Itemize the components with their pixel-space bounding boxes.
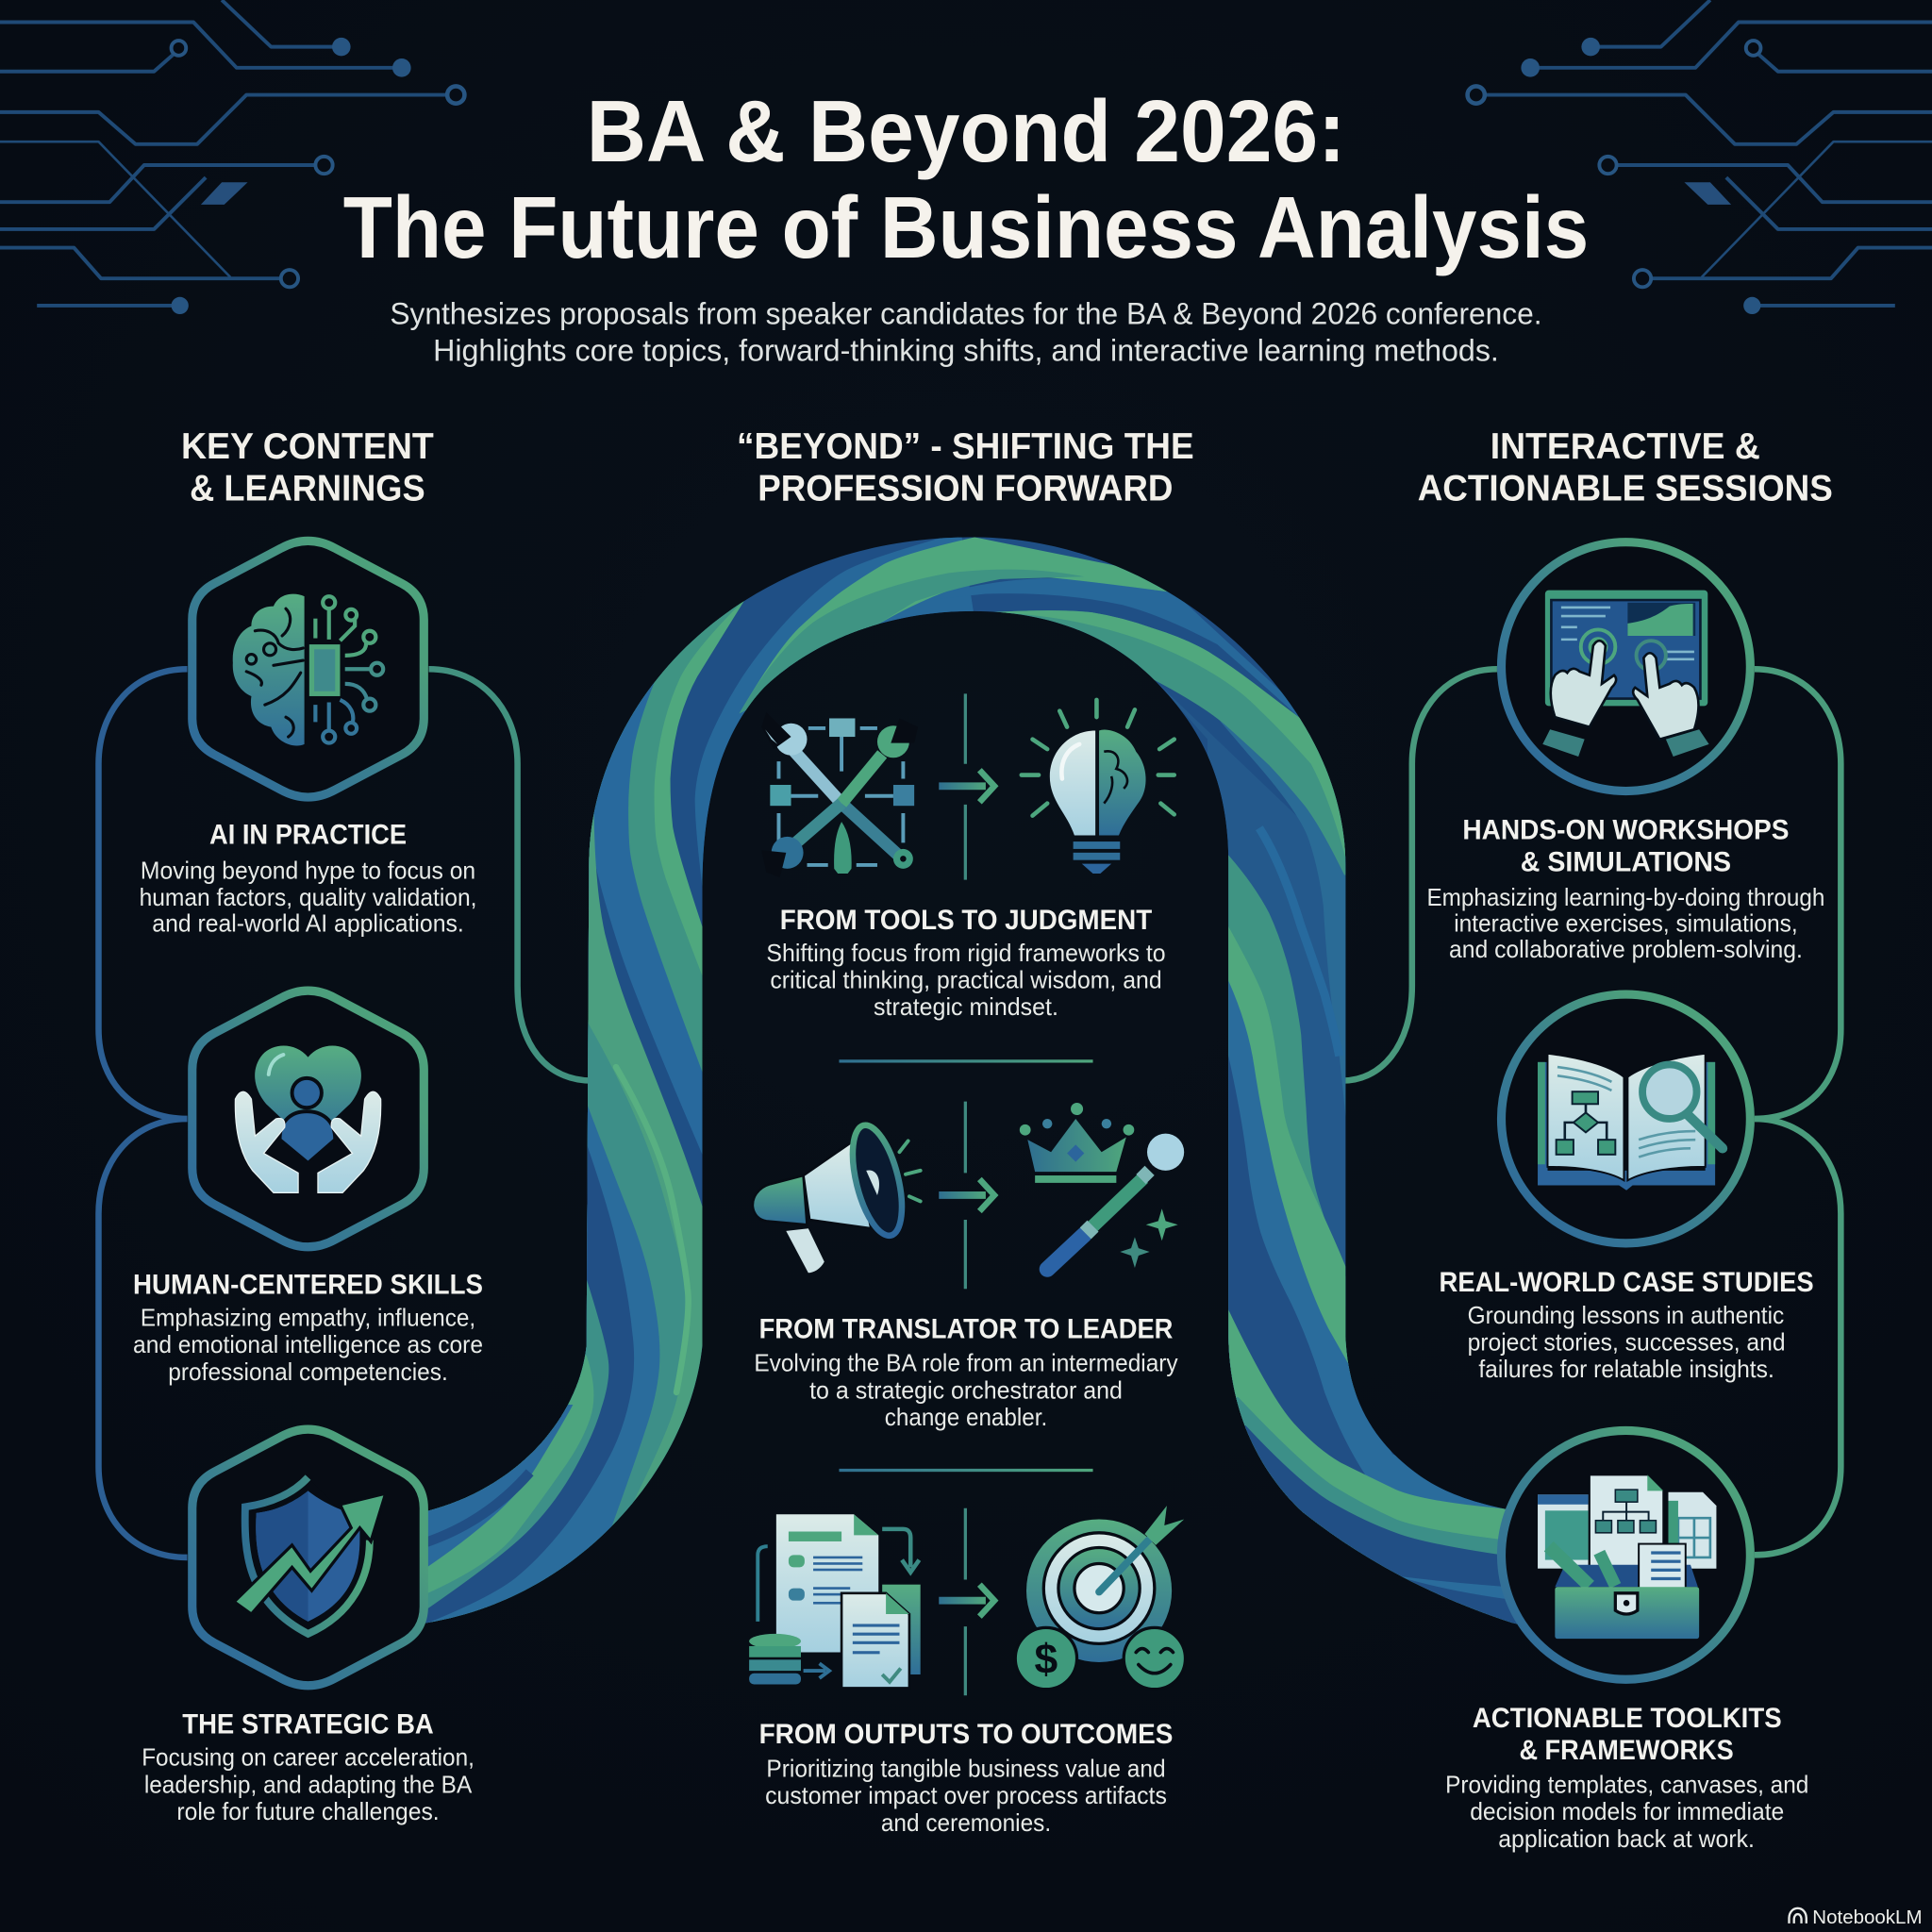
hexagon frame xyxy=(192,991,424,1247)
description: real-world case studies: project stories, successes, and xyxy=(1468,1328,1786,1357)
divider and arrow: translator to leader xyxy=(939,1102,994,1289)
circuit decoration: top right xyxy=(1468,0,1932,314)
description: actionable toolkits xyxy=(1445,1770,1808,1853)
connector lines: left column xyxy=(98,669,591,1557)
heading: human-centered skills: HUMAN-CENTERED SKILLS xyxy=(133,1269,483,1300)
description: from translator to leader: Evolving the BA role from an intermediary xyxy=(754,1349,1178,1377)
divider xyxy=(839,1059,1093,1063)
circle frame xyxy=(1502,994,1750,1243)
description: from tools to judgment: critical thinking, practical wisdom, and xyxy=(770,966,1162,994)
description: the strategic BA xyxy=(142,1743,475,1825)
heading: beyond, shifting the profession forward: “BEYOND” - SHIFTING THE xyxy=(737,426,1194,467)
icon: documents and database xyxy=(749,1514,921,1688)
panel: from translator to leader xyxy=(753,1102,1184,1431)
circle frame xyxy=(1502,542,1750,791)
description: from translator to leader: change enabler. xyxy=(885,1403,1047,1431)
icon: target with coin and smile: $ xyxy=(1035,1637,1058,1683)
description: from outputs to outcomes: customer impact over process artifacts xyxy=(765,1781,1167,1809)
heading: hands-on workshops: & SIMULATIONS xyxy=(1521,846,1731,877)
panel: AI in practice xyxy=(140,541,476,937)
subtitle: Highlights core topics, forward-thinking shifts, and interactive learning methods. xyxy=(433,333,1499,368)
title: BA & Beyond 2026: xyxy=(587,82,1345,180)
subtitle xyxy=(390,296,1542,368)
circle frame xyxy=(1502,1430,1750,1679)
icon: shield with growth arrow xyxy=(234,1477,386,1634)
description: from outputs to outcomes: and ceremonies. xyxy=(881,1808,1051,1837)
divider and arrow: tools to judgment xyxy=(939,693,994,880)
heading: from translator to leader: FROM TRANSLATOR TO LEADER xyxy=(759,1313,1174,1344)
description: from translator to leader xyxy=(754,1349,1178,1431)
description: human-centered skills xyxy=(133,1303,483,1386)
description: AI in practice: and real-world AI applications. xyxy=(152,908,464,937)
panel: from tools to judgment xyxy=(761,693,1174,1021)
heading: actionable toolkits: ACTIONABLE TOOLKITS xyxy=(1473,1703,1782,1734)
description: hands-on workshops: interactive exercises, simulations, xyxy=(1454,908,1798,937)
panel: from outputs to outcomes xyxy=(749,1506,1185,1837)
title xyxy=(343,82,1589,276)
heading: real-world case studies: REAL-WORLD CASE STUDIES xyxy=(1440,1267,1814,1298)
heading: hands-on workshops: HANDS-ON WORKSHOPS xyxy=(1462,814,1789,845)
description: from tools to judgment xyxy=(766,939,1166,1021)
description: hands-on workshops: and collaborative problem-solving. xyxy=(1449,935,1803,963)
hexagon frame xyxy=(192,1429,424,1686)
icon: framework and crossed wrenches xyxy=(761,712,918,877)
description: from tools to judgment: strategic mindset. xyxy=(874,992,1058,1021)
description: actionable toolkits: Providing templates, canvases, and xyxy=(1445,1770,1808,1798)
NotebookLM watermark: NotebookLM xyxy=(1812,1907,1923,1928)
description: human-centered skills: Emphasizing empathy, influence, xyxy=(141,1303,475,1331)
description: human-centered skills: and emotional intelligence as core xyxy=(133,1330,483,1358)
description: the strategic BA: leadership, and adapting the BA xyxy=(144,1770,473,1798)
heading: key content and learnings: & LEARNINGS xyxy=(190,468,425,508)
description: human-centered skills: professional competencies. xyxy=(168,1357,448,1386)
icon: lightbulb with brain xyxy=(1022,700,1174,874)
heading: interactive and actionable sessions: ACTIONABLE SESSIONS xyxy=(1418,468,1833,508)
heading: key content and learnings: KEY CONTENT xyxy=(181,426,434,467)
description: hands-on workshops xyxy=(1426,883,1824,963)
panel: human-centered skills xyxy=(133,991,483,1386)
icon: open book with magnifier xyxy=(1538,1054,1723,1191)
divider and arrow: outputs to outcomes xyxy=(939,1508,994,1695)
heading: from outputs to outcomes: FROM OUTPUTS TO OUTCOMES xyxy=(759,1719,1173,1750)
connector lines: right column xyxy=(1343,669,1840,1555)
title: The Future of Business Analysis xyxy=(343,178,1589,276)
heading: actionable toolkits: & FRAMEWORKS xyxy=(1519,1735,1734,1766)
panel: the strategic BA xyxy=(142,1429,475,1825)
description: AI in practice: human factors, quality validation, xyxy=(140,883,476,911)
subtitle: Synthesizes proposals from speaker candidates for the BA & Beyond 2026 conference. xyxy=(390,296,1542,331)
description: the strategic BA: Focusing on career acceleration, xyxy=(142,1743,475,1772)
icon: heart, person and hands xyxy=(235,1046,381,1192)
heading: hands-on workshops xyxy=(1462,814,1789,877)
icon: crown and wand xyxy=(1020,1103,1184,1269)
heading: from tools to judgment: FROM TOOLS TO JUDGMENT xyxy=(780,905,1153,936)
heading: actionable toolkits xyxy=(1473,1703,1782,1766)
panel: actionable toolkits and frameworks xyxy=(1445,1430,1808,1853)
description: actionable toolkits: decision models for immediate xyxy=(1470,1797,1784,1825)
heading: interactive and actionable sessions: INTERACTIVE & xyxy=(1491,426,1760,467)
heading: beyond, shifting the profession forward: PROFESSION FORWARD xyxy=(758,468,1173,508)
panel: hands-on workshops and simulations xyxy=(1426,542,1824,963)
heading: beyond, shifting the profession forward xyxy=(737,426,1194,508)
description: from translator to leader: to a strategic orchestrator and xyxy=(809,1375,1123,1404)
description: the strategic BA: role for future challenges. xyxy=(176,1797,440,1825)
divider xyxy=(839,1469,1093,1472)
circuit decoration: top left xyxy=(0,0,464,314)
icon: tablet with two hands xyxy=(1542,591,1709,757)
icon: megaphone xyxy=(753,1121,921,1273)
description: from outputs to outcomes: Prioritizing tangible business value and xyxy=(766,1754,1166,1782)
description: hands-on workshops: Emphasizing learning-by-doing through xyxy=(1426,883,1824,911)
icon: toolbox with documents and wrenches xyxy=(1538,1474,1716,1639)
hexagon frame xyxy=(192,541,424,797)
icon: brain and circuit chip xyxy=(233,594,383,746)
description: from tools to judgment: Shifting focus from rigid frameworks to xyxy=(766,939,1166,967)
description: real-world case studies: Grounding lessons in authentic xyxy=(1468,1301,1784,1329)
heading: AI in practice: AI IN PRACTICE xyxy=(209,820,407,851)
description: from outputs to outcomes xyxy=(765,1754,1167,1837)
description: real-world case studies xyxy=(1468,1301,1786,1383)
heading: the strategic BA: THE STRATEGIC BA xyxy=(182,1709,434,1740)
description: AI in practice: Moving beyond hype to focus on xyxy=(141,856,475,884)
icon: target with coin and smile xyxy=(1015,1506,1185,1690)
heading: interactive and actionable sessions xyxy=(1418,426,1833,508)
heading: key content and learnings xyxy=(181,426,434,508)
panel: real-world case studies xyxy=(1440,994,1814,1383)
description: AI in practice xyxy=(140,856,476,937)
central twisted ribbon arch xyxy=(407,530,1541,1663)
description: real-world case studies: failures for relatable insights. xyxy=(1478,1355,1774,1383)
description: actionable toolkits: application back at work. xyxy=(1498,1824,1755,1853)
